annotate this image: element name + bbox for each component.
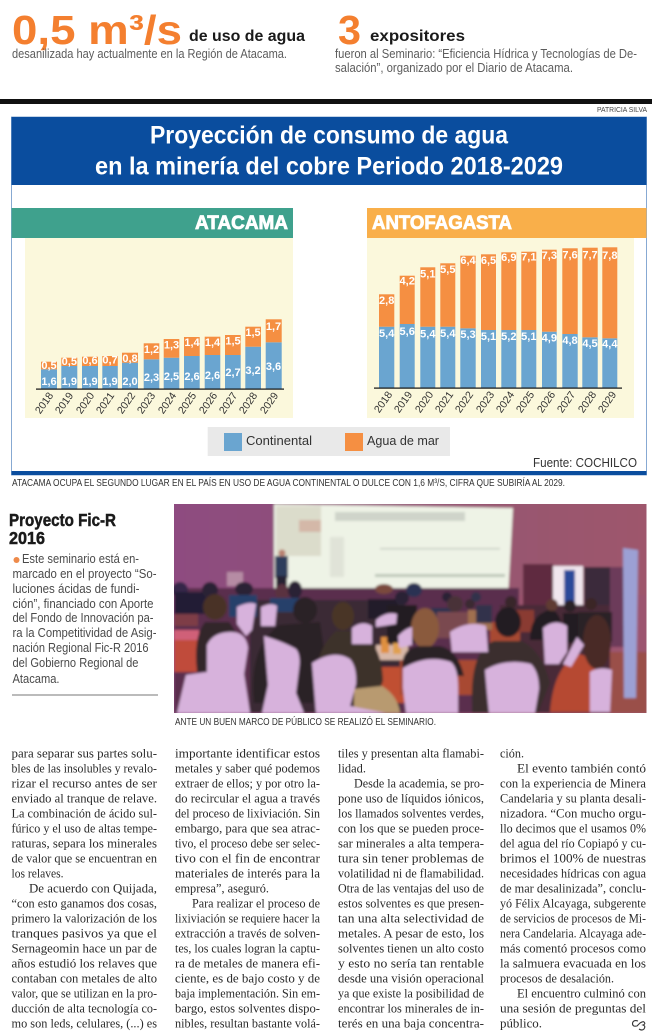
sidebar text: luciones ácidas de fundi- xyxy=(12,582,140,596)
article column 3: sar minerales a alta tempera- xyxy=(338,837,484,851)
article column 2: tes, los cuales logran la captu- xyxy=(175,942,320,956)
sidebar text: del Gobierno Regional de xyxy=(12,656,138,670)
article column 1: raturas, separa los minerales xyxy=(12,837,157,851)
article column 2: empresa”, aseguró. xyxy=(175,882,269,896)
chart: Antofagasta: 5,3 xyxy=(460,329,476,341)
article column 3: terés en una baja concentra- xyxy=(338,1017,484,1031)
chart: Atacama: 2,0 xyxy=(122,376,138,388)
chart: Antofagasta: 7,8 xyxy=(602,250,617,262)
chart: Antofagasta: 2029 xyxy=(596,389,619,415)
chart: Antofagasta: 2021 xyxy=(433,389,456,415)
chart: Antofagasta: 4,2 xyxy=(400,276,415,288)
sidebar text: nación Regional Fic-R 2016 xyxy=(12,641,148,655)
sidebar text: del Fondo de Innovación pa- xyxy=(12,611,154,625)
article column 4: una sesión de preguntas del xyxy=(500,1002,646,1016)
article column 4: Candelaria y su planta desali- xyxy=(500,792,646,806)
chart: Atacama: 2024 xyxy=(156,390,179,416)
article column 4: más comentó procesos como xyxy=(500,942,646,956)
photo caption: ANTE UN BUEN MARCO DE PÚBLICO SE REALIZÓ EL SEMINARIO. xyxy=(175,715,436,728)
chart: Antofagasta: 7,1 xyxy=(521,252,536,264)
article column 1: valor, que se utilizan en la pro- xyxy=(12,987,157,1001)
article column 3: tan una alta selectividad de xyxy=(338,912,484,926)
stat: 3 expositores xyxy=(335,7,637,75)
chart: Antofagasta: 4,8 xyxy=(562,335,578,347)
article column 3: volatilidad ni de flamabilidad. xyxy=(338,867,484,881)
sidebar text: marcado en el proyecto “So- xyxy=(12,567,156,581)
stat: 3 expositores: 3 xyxy=(338,7,361,53)
chart: Antofagasta: 2026 xyxy=(535,389,558,415)
article column 4: de mar desalinizada”, conclu- xyxy=(500,882,646,896)
chart: Atacama: 2,3 xyxy=(144,372,159,384)
article column 4: yó Félix Alcayaga, subgerente xyxy=(500,897,646,911)
chart: Antofagasta: 5,2 xyxy=(501,331,516,343)
article column 4: ción. xyxy=(500,747,524,761)
chart: Atacama: 2028 xyxy=(237,390,260,416)
chart: Antofagasta: 5,5 xyxy=(440,264,455,276)
chart: Antofagasta: 2023 xyxy=(474,389,497,415)
article column 3: solventes tienen un alto costo xyxy=(338,942,484,956)
article column 3: ya que existe la posibilidad de xyxy=(338,987,484,1001)
article column 2: materiales de interés para la xyxy=(175,867,320,881)
mid-ground fill between rows xyxy=(174,588,519,713)
article column 3: lidad. xyxy=(338,762,366,776)
chart: Atacama xyxy=(12,208,293,418)
chart: Atacama: 0,7 xyxy=(102,354,118,366)
stat: 0,5 m3/s de uso de agua: desanilizada hay actualmente en la Región de Atacama. xyxy=(12,47,287,61)
chart: Antofagasta: 6,4 xyxy=(460,255,477,267)
sidebar text: Atacama. xyxy=(12,672,60,686)
chart: Atacama: ATACAMA xyxy=(195,213,288,234)
article column 4: procesos de desalación. xyxy=(500,972,614,986)
chart: Atacama: 0,6 xyxy=(82,355,98,367)
article column 1 xyxy=(12,747,158,1031)
chart: Atacama: 1,9 xyxy=(62,376,77,388)
chart: Atacama: 2026 xyxy=(197,390,220,416)
chart: Atacama: 2019 xyxy=(53,390,76,416)
chart: Antofagasta: 2,8 xyxy=(379,295,394,307)
article column 2: importante identificar estos xyxy=(175,747,320,761)
article column 1: contaban con metales de alto xyxy=(12,972,157,986)
chart: Atacama: 2021 xyxy=(94,390,117,416)
article column 1: ducción de alta tecnología co- xyxy=(12,1002,157,1016)
chart title: en la minería del cobre Periodo 2018-2029 xyxy=(95,152,563,180)
article column 2: nibles, resultan bastante volá- xyxy=(175,1017,320,1031)
article column 3: encontrar los minerales de in- xyxy=(338,1002,484,1016)
article column 1: mo son leds, celulares, (...) es xyxy=(12,1017,157,1031)
chart: Atacama: 2022 xyxy=(115,390,138,416)
sidebar text: ra la Competitividad de Asig- xyxy=(12,626,156,640)
article column 4: del agua del río Copiapó y cu- xyxy=(500,837,646,851)
article column 2: lixiviación se requiere hacer la xyxy=(175,912,320,926)
article column 3: desde una visión operacional xyxy=(338,972,484,986)
chart: Antofagasta: 2019 xyxy=(392,389,415,415)
chart: Atacama: 1,7 xyxy=(266,321,281,333)
article column 2: Para realizar el proceso de xyxy=(192,897,320,911)
sidebar text: ción”, financiado con Aporte xyxy=(12,597,154,611)
source: Fuente: COCHILCO xyxy=(533,455,637,470)
chart: Atacama: 2020 xyxy=(74,390,97,416)
article column 3: y esto no sería tan rentable xyxy=(338,957,484,971)
stat: 0,5 m3/s de uso de agua: 0,5 m³/s xyxy=(12,7,182,53)
chart: Atacama: 2018 xyxy=(33,390,56,416)
article column 1: De acuerdo con Quijada, xyxy=(29,882,157,896)
chart: Antofagasta: 4,5 xyxy=(582,338,598,350)
article column 1: años estudió los relaves que xyxy=(12,957,157,971)
chart: Atacama: 1,4 xyxy=(205,337,221,349)
chart: Antofagasta: 6,9 xyxy=(501,252,516,264)
speaker xyxy=(275,556,288,578)
sidebar text xyxy=(12,552,156,686)
article column 2: ciente, es de bajo costo y de xyxy=(175,972,320,986)
chart: Antofagasta: 4,9 xyxy=(542,332,557,344)
chart: Antofagasta: 2022 xyxy=(453,389,476,415)
chart: Atacama: 2025 xyxy=(176,390,199,416)
chart: Antofagasta: 7,6 xyxy=(562,250,578,262)
article column 2: extraer de ellos; y por otro la- xyxy=(175,777,320,791)
article column 4: brimos el 100% de nuestras xyxy=(500,852,646,866)
sidebar: Proyecto Fic-R 2016 xyxy=(9,510,156,686)
right banners and floor xyxy=(522,563,554,607)
article column 1: de valor que se encuentran en xyxy=(12,852,158,866)
chart: Atacama: 0,8 xyxy=(122,353,138,365)
article column 1: bles de las insolubles y revalo- xyxy=(12,762,157,776)
chart: Atacama: 2027 xyxy=(217,390,240,416)
article column 3: Desde la academia, se pro- xyxy=(354,777,484,791)
chart title xyxy=(12,117,646,185)
article column 2: extracción a través de solven- xyxy=(175,927,320,941)
article column 4: El encuentro culminó con xyxy=(517,987,647,1001)
article column 2 xyxy=(175,747,321,1031)
article column 1: tranques pasivos ya que el xyxy=(12,927,157,941)
chart: Antofagasta: 5,4 xyxy=(440,328,456,340)
stat: 0,5 m3/s de uso de agua: de uso de agua xyxy=(189,28,305,45)
sidebar text: Este seminario está en- xyxy=(22,552,139,566)
article column 4: necesidades hídricas con agua xyxy=(500,867,646,881)
rear wall band xyxy=(500,595,647,655)
article column 1: fúrico y el uso de altas tempe- xyxy=(12,822,157,836)
article column 2: tivo, el proceso debe ser selec- xyxy=(175,837,320,851)
article column 1: los relaves. xyxy=(12,867,64,881)
chart: Antofagasta: 5,6 xyxy=(400,326,415,338)
article column 2: baja implementación. Sin em- xyxy=(175,987,320,1001)
chart: Antofagasta: 5,1 xyxy=(481,331,496,343)
chart: Atacama: 3,6 xyxy=(266,361,281,373)
chart: Antofagasta: 5,1 xyxy=(420,268,435,280)
chart: Atacama: 1,6 xyxy=(41,376,57,388)
article column 4 xyxy=(500,747,647,1031)
article column 2: embargo, para que sea atrac- xyxy=(175,822,320,836)
article column 1: Sernageomin hace un par de xyxy=(12,942,157,956)
photo credit: PATRICIA SILVA xyxy=(597,107,647,114)
chart: Atacama: 0,5 xyxy=(41,360,57,372)
chart: Atacama: 2029 xyxy=(258,390,281,416)
panel: water consumption chart xyxy=(12,117,646,475)
chart: Atacama: 1,4 xyxy=(184,337,201,349)
chart: Antofagasta xyxy=(367,208,646,418)
chart: Antofagasta: 6,5 xyxy=(481,255,496,267)
article column 2: del proceso de lixiviación. Sin xyxy=(175,807,321,821)
article column 3: con los que se pueden proce- xyxy=(338,822,484,836)
chart: Atacama: 2,5 xyxy=(164,371,179,383)
article column 3: Otra de las ventajas del uso de xyxy=(338,882,484,896)
icon: end-of-article mark xyxy=(632,1021,645,1030)
chart: Antofagasta: 2018 xyxy=(372,389,395,415)
chart: Antofagasta: 2024 xyxy=(494,389,517,415)
article column 3: tiles y presentan alta flamabi- xyxy=(338,747,484,761)
sidebar heading: 2016 xyxy=(9,528,45,548)
article column 2: tivo con el fin de encontrar xyxy=(175,852,321,866)
sidebar heading: Proyecto Fic-R xyxy=(9,510,116,530)
chart: Antofagasta: ANTOFAGASTA xyxy=(372,213,512,234)
chart: Antofagasta: 5,1 xyxy=(521,331,536,343)
chart: Atacama: 1,3 xyxy=(164,340,179,352)
far heads xyxy=(172,581,612,643)
article column 4: con la experiencia de Minera xyxy=(500,777,646,791)
article column 4: llo decimos que el usamos 0% xyxy=(500,822,646,836)
article column 2: do recircular el agua a través xyxy=(175,792,320,806)
article column 2: metales y saber qué podemos xyxy=(175,762,320,776)
chart: Antofagasta: 5,4 xyxy=(420,328,436,340)
chart: Atacama: 2,6 xyxy=(205,370,220,382)
article column 4: la salmuera evacuada en los xyxy=(500,957,646,971)
chart: Atacama: 1,5 xyxy=(245,327,261,339)
stat: 3 expositores: salación”, organizado por el Diario de Atacama. xyxy=(335,61,573,75)
article column 4: nizadora. “Con mucho orgu- xyxy=(500,807,646,821)
stat: 0,5 m3/s de uso de agua xyxy=(12,7,305,61)
chart title: Proyección de consumo de agua xyxy=(150,122,509,150)
sidebar heading xyxy=(9,510,116,548)
chart: Atacama: 2023 xyxy=(135,390,158,416)
chart: Antofagasta: 7,3 xyxy=(542,250,557,262)
chart: Antofagasta: 4,4 xyxy=(602,338,618,350)
article column 3 xyxy=(338,747,484,1031)
article column 3: metales. A pesar de esto, los xyxy=(338,927,484,941)
stat: 3 expositores: expositores xyxy=(370,28,465,45)
red tables xyxy=(174,640,199,672)
article column 1: rizar el recurso antes de ser xyxy=(12,777,158,791)
article column 4: El evento también contó xyxy=(517,762,646,776)
near audience xyxy=(203,594,227,620)
chart: Atacama: 0,5 xyxy=(62,356,77,368)
chart: Antofagasta: 7,7 xyxy=(582,250,598,262)
article column 3: pone uso de líquidos iónicos, xyxy=(338,792,484,806)
chart: Atacama: 1,2 xyxy=(144,344,159,356)
article column 3: tura sin tener problemas de xyxy=(338,852,484,866)
article column 2: bargo, estos solventes dispo- xyxy=(175,1002,320,1016)
projection screen xyxy=(274,504,513,598)
chart: Atacama: 1,9 xyxy=(102,376,118,388)
article column 4: público. xyxy=(500,1017,542,1031)
chart: Atacama: 2,6 xyxy=(184,371,200,383)
article column 1: La combinación de ácido sul- xyxy=(12,807,157,821)
article column 1: para separar sus partes solu- xyxy=(12,747,157,761)
chart: Antofagasta: 2028 xyxy=(576,389,599,415)
chart: Antofagasta: 2027 xyxy=(555,389,578,415)
article column 1: primero la valorización de los xyxy=(12,912,157,926)
chart: Antofagasta: 2020 xyxy=(413,389,436,415)
chart: Atacama: 3,2 xyxy=(245,365,261,377)
legend xyxy=(208,427,450,456)
legend: Agua de mar xyxy=(367,433,440,448)
chart: Antofagasta: 2025 xyxy=(514,389,537,415)
article column 1: “con esto ganamos dos cosas, xyxy=(12,897,157,911)
article column 3: estos solventes es que presen- xyxy=(338,897,484,911)
article column 3: los llamados solventes verdes, xyxy=(338,807,484,821)
article column 1: enviado al tranque de relave. xyxy=(12,792,157,806)
chart: Antofagasta: 5,4 xyxy=(379,328,395,340)
lectern xyxy=(227,572,243,586)
legend: Continental xyxy=(246,433,312,448)
photo: seminar audience xyxy=(170,500,650,716)
chart: Atacama: 1,5 xyxy=(225,336,241,348)
article column 2: ra de metales de manera efi- xyxy=(175,957,320,971)
chart: Atacama: 1,9 xyxy=(82,376,98,388)
sidebar bullet xyxy=(14,557,20,563)
chairs xyxy=(177,603,612,713)
chart: Atacama: 2,7 xyxy=(225,367,241,379)
